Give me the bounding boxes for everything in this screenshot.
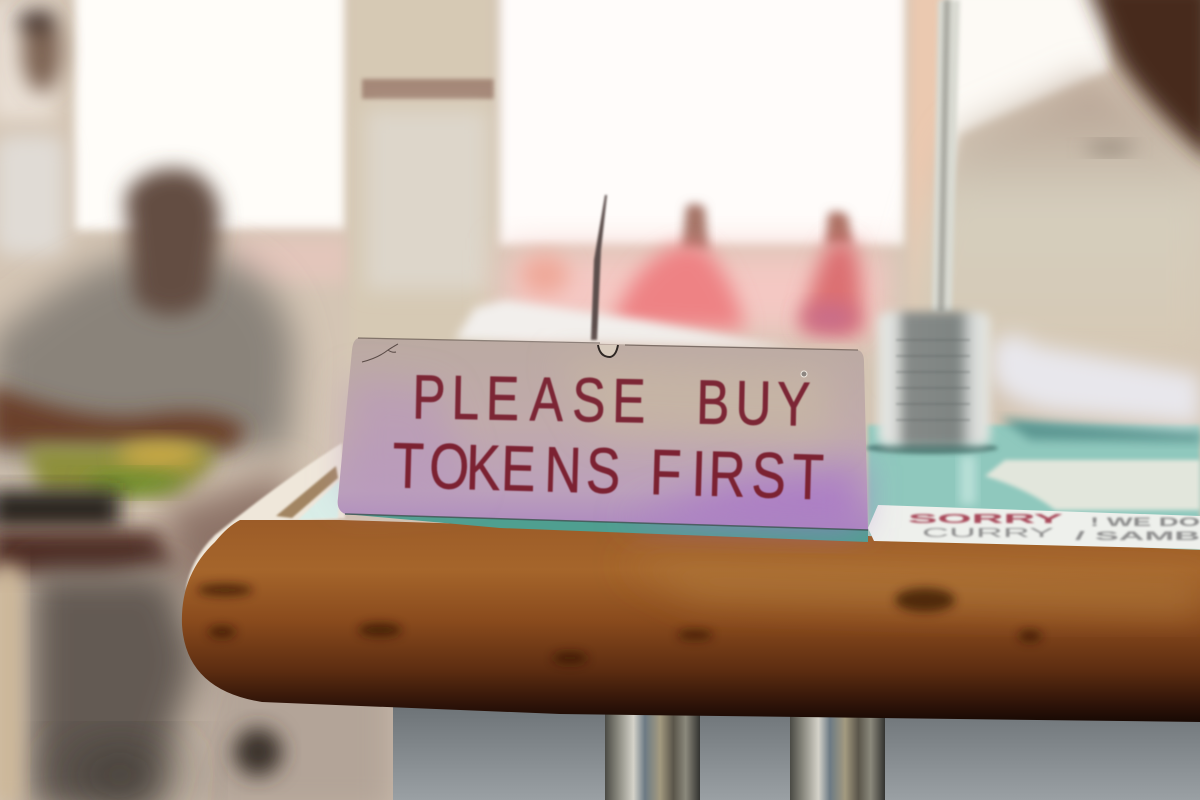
chrome leg right <box>790 712 885 800</box>
strip text: SORRY <box>908 511 1064 526</box>
glass sliver under sign <box>345 514 868 542</box>
strip text: / SAMB <box>1075 529 1200 543</box>
side glow <box>521 255 569 295</box>
glass sliver left of sign <box>298 480 340 520</box>
spike behind sign <box>591 195 607 340</box>
left window <box>75 0 345 230</box>
torso <box>0 255 295 460</box>
far-left wall <box>0 0 56 120</box>
blurred person: seated left <box>0 168 295 800</box>
pillar pale panel <box>366 110 488 290</box>
centre window <box>500 0 905 245</box>
main wood body <box>182 520 1200 722</box>
rod and coin holder <box>866 0 998 454</box>
left wall below window <box>230 235 350 283</box>
sign edges <box>358 338 858 350</box>
table leg tan strip <box>0 565 20 800</box>
sign text line 1: PLEASEBUY <box>412 362 811 439</box>
crack in top-left corner <box>362 344 398 362</box>
wooden counter edge <box>182 443 1200 722</box>
sign text line 2: TOKENSFIRST <box>392 431 825 513</box>
red-brown shadow under table <box>0 530 180 575</box>
floor tone <box>200 560 400 800</box>
glass light stripe <box>960 455 976 505</box>
head <box>125 168 220 315</box>
tray of paper on glass <box>985 460 1200 510</box>
wood grain marks <box>197 584 1042 664</box>
metal sign: please buy tokens first <box>338 338 868 530</box>
blurred pink figures in centre window <box>521 204 862 335</box>
paper stack behind sign <box>455 300 800 350</box>
strip text: CURRY <box>922 525 1055 540</box>
blurred person: standing far left <box>0 8 65 255</box>
head <box>1085 0 1200 165</box>
sign reflections <box>345 380 470 500</box>
rod <box>932 0 960 312</box>
right window <box>948 0 1110 210</box>
forearms <box>0 385 248 450</box>
pale frame rim <box>186 443 345 590</box>
collar shadow <box>1086 142 1134 154</box>
screw mark <box>801 371 807 377</box>
lap <box>160 470 290 600</box>
chrome leg left <box>605 712 700 800</box>
strip text: ! WE DO <box>1090 515 1200 529</box>
notice strip: sorry <box>868 505 1200 549</box>
central pillar <box>350 0 492 470</box>
dark teal reflection under papers <box>1000 418 1200 442</box>
papers on the counter <box>992 335 1200 425</box>
plate of food <box>25 445 215 495</box>
shoe shadow <box>234 728 282 776</box>
blurred man at right <box>900 0 1200 370</box>
strip text <box>908 511 1200 543</box>
notch at sign top <box>598 345 618 357</box>
warm highlight <box>620 560 1200 615</box>
counter glass surface <box>868 335 1200 550</box>
figure one <box>682 204 708 250</box>
coin stack <box>878 312 990 446</box>
lower body <box>30 570 200 800</box>
pillar dark band <box>362 79 494 99</box>
figure two <box>826 211 852 245</box>
table base panel and chrome legs <box>393 700 1200 800</box>
peach pillar right of window <box>910 0 946 320</box>
wood strip of inner frame <box>276 466 338 518</box>
centre window lower glow <box>505 250 890 335</box>
holder shadow <box>866 442 998 454</box>
dark table <box>0 490 120 528</box>
